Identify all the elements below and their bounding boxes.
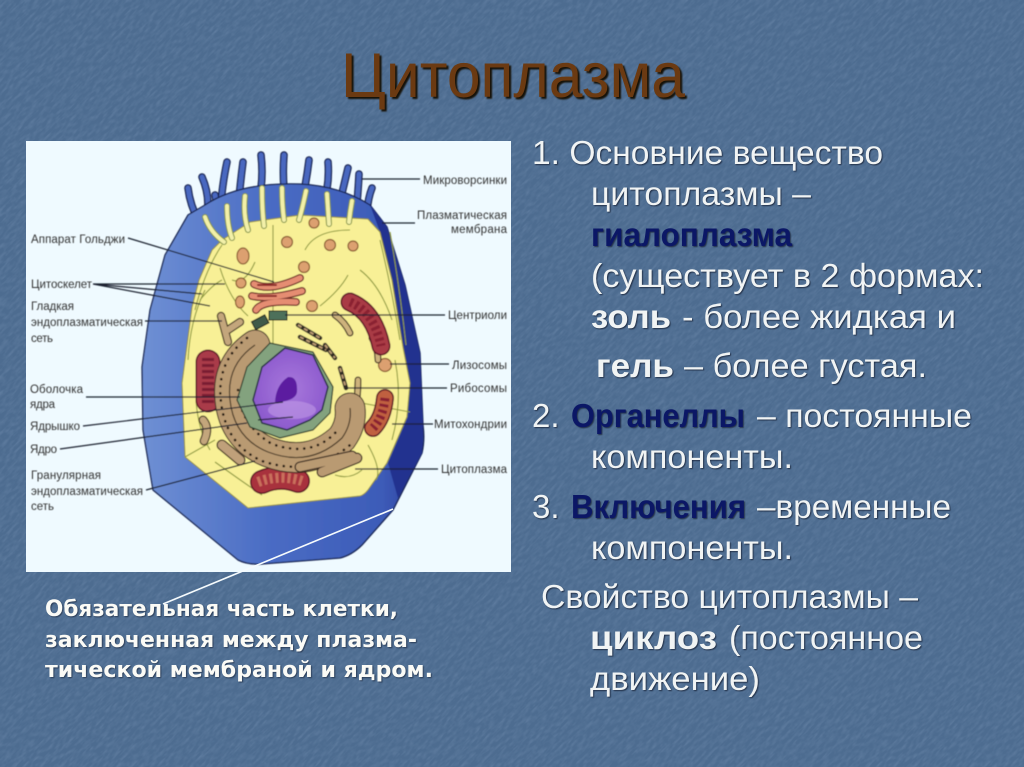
item 1: ground substance: гиалоплазма: [591, 216, 793, 253]
centrioles: [251, 311, 287, 330]
caption text: заключенная между плазма-: [45, 628, 417, 653]
diagram labels: ядра: [30, 399, 56, 411]
diagram labels: Лизосомы: [452, 360, 507, 372]
panel: cell diagram: [26, 141, 511, 572]
nucleolus: [275, 377, 297, 402]
diagram labels: Плазматическая: [417, 210, 507, 222]
yellow villus cores: [205, 188, 352, 242]
item 3: inclusions: компоненты.: [591, 529, 793, 566]
granular endoplasmic reticulum: [220, 325, 357, 472]
callout pointer line: [163, 509, 393, 604]
Golgi apparatus: [252, 278, 302, 310]
caption text: [45, 597, 433, 683]
diagram labels: эндоплазматическая: [31, 486, 143, 498]
diagram labels: Микроворсинки: [423, 175, 507, 187]
shell: dark right rim: [370, 205, 423, 498]
cell illustration: [60, 155, 449, 564]
diagram labels: Цитоплазма: [441, 464, 508, 476]
item 2: organelles: – постоянные: [757, 397, 972, 434]
item 1: ground substance: цитоплазмы –: [591, 175, 812, 212]
diagram labels: Ядрышко: [30, 421, 80, 433]
caption text: Обязательная часть клетки,: [45, 597, 398, 622]
diagram labels: Гладкая: [31, 301, 74, 313]
item 1: ground substance: 1. Основние вещество: [532, 134, 883, 171]
item 1: ground substance: – более густая.: [684, 347, 927, 384]
cell body: outer blue cytoplasm shell: [142, 184, 424, 564]
diagram labels: Ядро: [30, 444, 57, 456]
item 3: inclusions: 3.: [532, 488, 560, 525]
property: cyclosis: Свойство цитоплазмы –: [541, 578, 919, 615]
item 2: organelles: компоненты.: [591, 438, 793, 475]
text block: list: [532, 134, 984, 697]
diagram labels: эндоплазматическая: [31, 317, 143, 329]
title: Цитоплазма: [341, 41, 686, 111]
microvilli: [188, 155, 372, 222]
diagram labels: Оболочка: [30, 384, 84, 396]
diagram labels: Аппарат Гольджи: [31, 234, 125, 246]
diagram labels: сеть: [31, 501, 54, 513]
item 2: organelles: [532, 397, 972, 475]
item 3: inclusions: [532, 488, 951, 566]
item 3: inclusions: Включения: [571, 488, 746, 525]
caption text: тической мембраной и ядром.: [45, 658, 433, 683]
diagram labels: мембрана: [451, 224, 508, 236]
property: cyclosis: [541, 578, 923, 697]
smooth endoplasmic reticulum: [203, 315, 378, 460]
diagram labels: [30, 175, 508, 513]
diagram labels: Цитоскелет: [31, 279, 93, 291]
diagram labels: Рибосомы: [450, 383, 507, 395]
inner yellow cytoplasm: [182, 215, 410, 508]
lysosomes: [236, 218, 392, 372]
item 1: ground substance: - более жидкая и: [682, 298, 956, 335]
diagram labels: Гранулярная: [31, 470, 101, 482]
property: cyclosis: циклоз: [590, 619, 717, 656]
nuclear envelope: [237, 343, 333, 438]
item 1: ground substance: золь: [591, 298, 671, 335]
diagram labels: Митохондрии: [434, 419, 507, 431]
item 3: inclusions: –временные: [757, 488, 951, 525]
item 2: organelles: Органеллы: [571, 397, 745, 434]
property: cyclosis: движение): [590, 660, 760, 697]
mitochondria: [208, 302, 385, 482]
cytoskeleton and membrane fibres: [185, 225, 410, 495]
property: cyclosis: (постоянное: [729, 619, 923, 656]
leader lines: [60, 179, 449, 490]
nucleus: [253, 348, 328, 430]
item 2: organelles: 2.: [532, 397, 560, 434]
diagram labels: сеть: [31, 333, 53, 345]
item 1: ground substance: (существует в 2 формах:: [591, 257, 984, 294]
panel background: [26, 141, 511, 572]
item 1: ground substance: гель: [596, 347, 674, 384]
item 1: ground substance: [532, 134, 984, 384]
diagram labels: Центриоли: [448, 310, 507, 322]
